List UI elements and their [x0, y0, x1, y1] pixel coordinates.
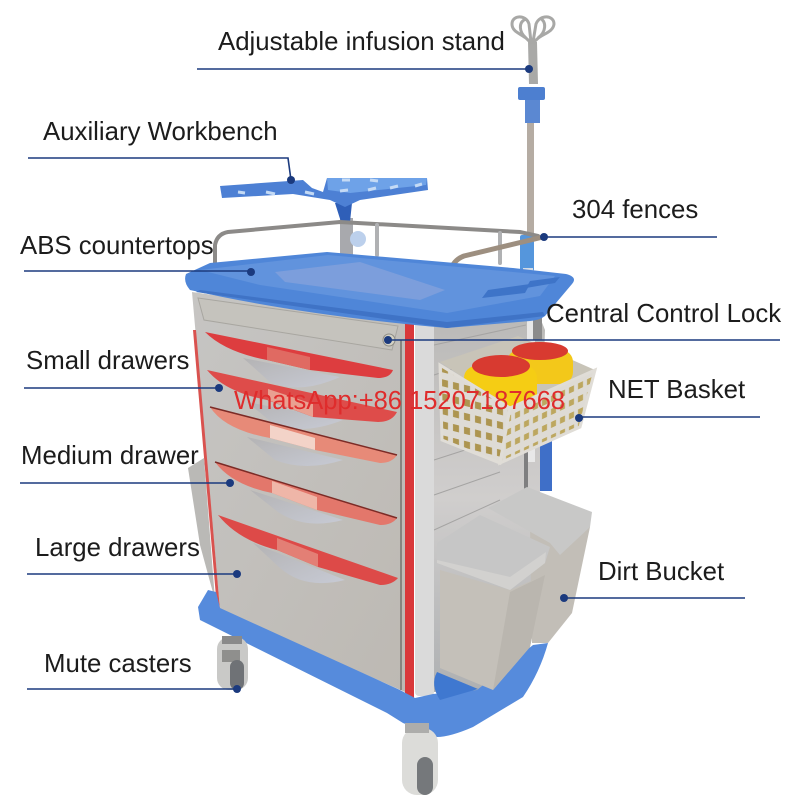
auxiliary workbench — [220, 178, 428, 256]
label: adjustable infusion stand: Adjustable infusion stand — [218, 28, 505, 56]
label: 304 fences — [540, 196, 717, 241]
label: auxiliary workbench — [28, 118, 295, 184]
label: NET basket — [575, 376, 760, 422]
label: mute casters — [27, 650, 241, 693]
label: large drawers: Large drawers — [35, 534, 200, 562]
medium drawers — [210, 407, 397, 525]
label: NET basket: NET Basket — [608, 376, 745, 404]
label: mute casters: Mute casters — [44, 650, 192, 678]
large drawer — [218, 515, 398, 585]
label: dirt bucket: Dirt Bucket — [598, 558, 724, 586]
mute casters — [217, 636, 438, 795]
body of trolley — [192, 292, 552, 698]
label: small drawers: Small drawers — [26, 347, 189, 375]
dirt buckets — [437, 487, 592, 690]
label: ABS countertops — [20, 232, 255, 276]
base — [198, 590, 548, 737]
label: medium drawer — [20, 442, 234, 487]
304 fence rail — [215, 222, 543, 294]
label: central control lock — [384, 300, 781, 344]
infusion stand — [512, 17, 554, 276]
label: small drawers — [24, 347, 223, 392]
label: auxiliary workbench: Auxiliary Workbench — [43, 118, 278, 146]
watermark: WhatsApp:+86 15207187668 — [234, 387, 565, 415]
small drawers — [205, 332, 397, 429]
label: medium drawer: Medium drawer — [21, 442, 199, 470]
label: adjustable infusion stand — [197, 28, 533, 73]
label: large drawers — [27, 534, 241, 578]
label: ABS countertops: ABS countertops — [20, 232, 214, 260]
label: central control lock: Central Control Lock — [546, 300, 781, 328]
net basket — [440, 336, 595, 463]
side pocket — [188, 458, 215, 600]
label: dirt bucket — [560, 558, 745, 602]
label: 304 fences: 304 fences — [572, 196, 698, 224]
countertop tray — [185, 252, 574, 328]
